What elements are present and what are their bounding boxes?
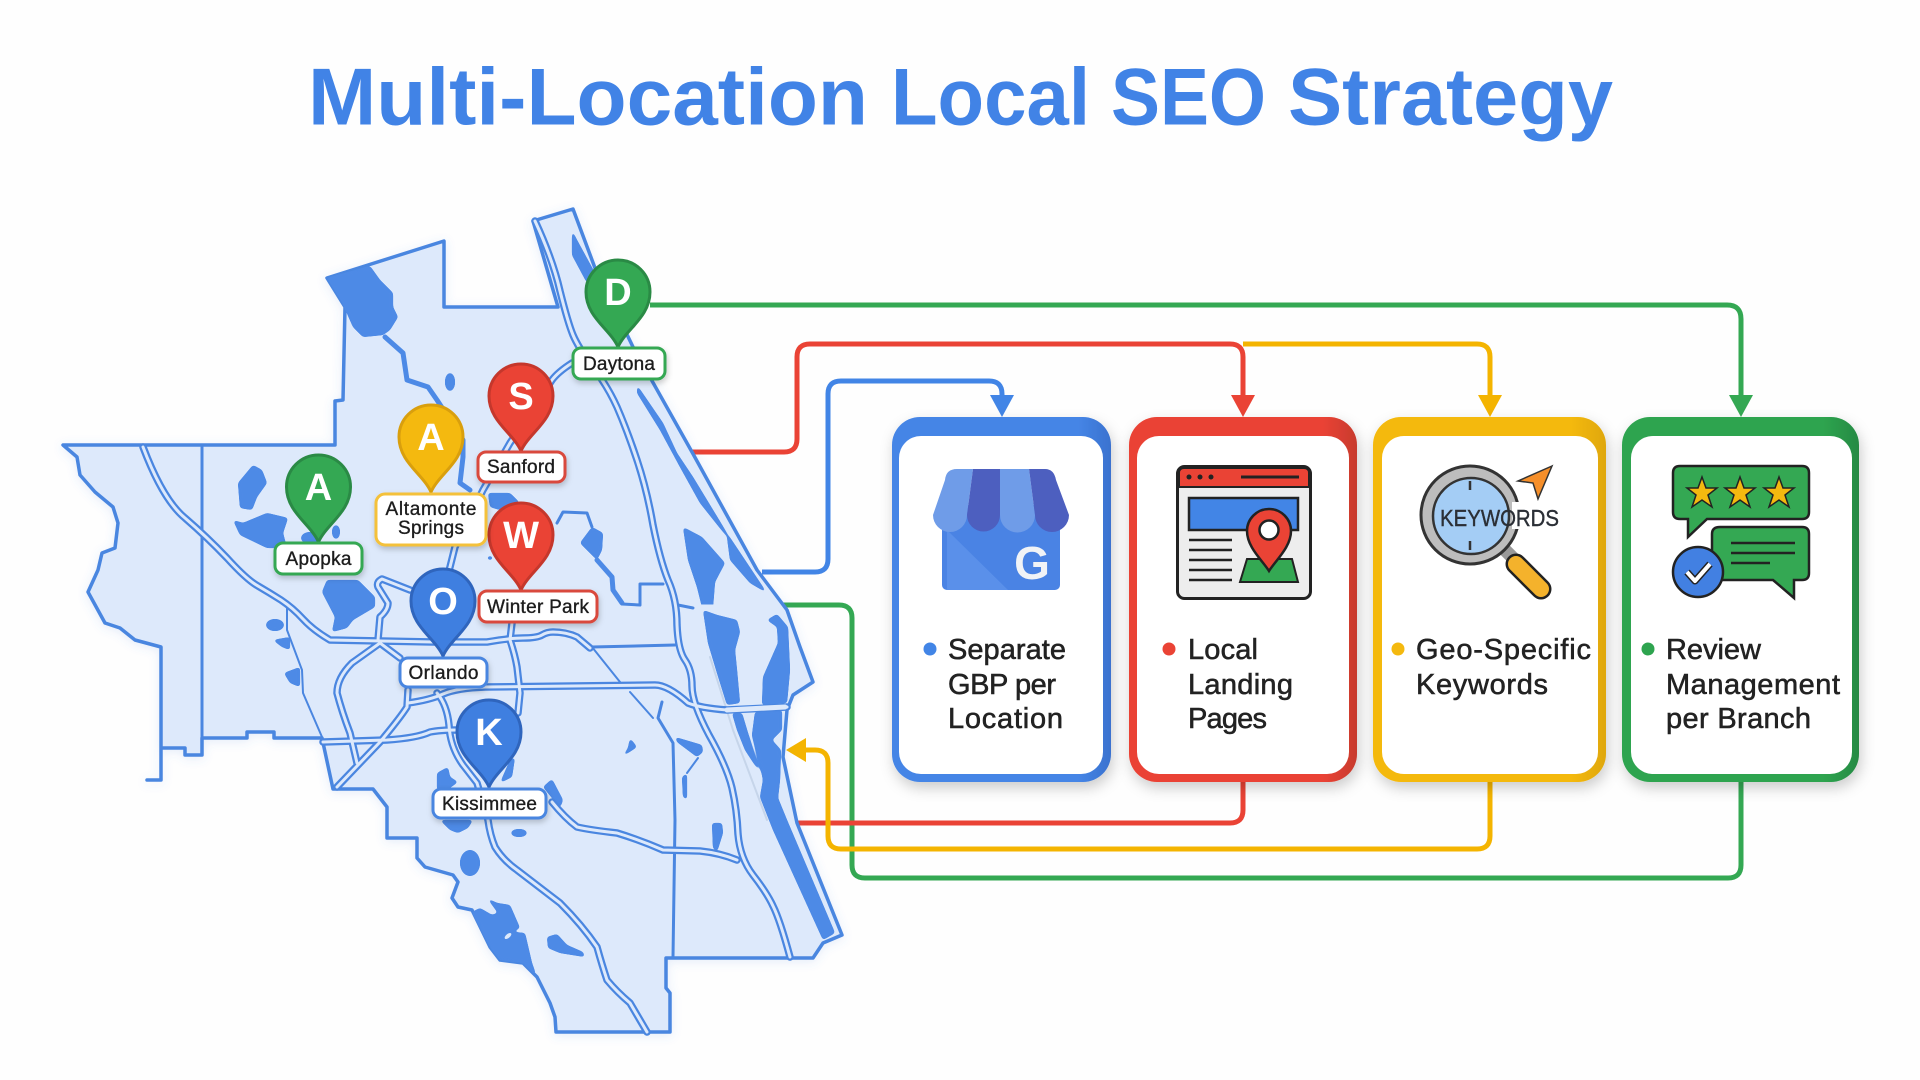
card text (948, 634, 1066, 735)
card text: Separate (948, 634, 1066, 666)
title (308, 52, 1613, 142)
icon: reviews with stars and check (1673, 466, 1809, 598)
label: Apopka (275, 543, 362, 574)
title: Multi-Location (308, 52, 868, 142)
pin: Apopka (286, 455, 350, 542)
card text: Landing (1188, 669, 1293, 701)
arrow: reviews back to map (783, 605, 1741, 878)
title: SEO (1111, 52, 1266, 142)
title: Strategy (1288, 52, 1613, 142)
pin: Orlando (411, 569, 475, 656)
label: Altamonte Springs: Springs (398, 518, 464, 539)
card text: Review (1666, 634, 1762, 666)
card text (1666, 634, 1840, 735)
card text: per Branch (1666, 703, 1811, 735)
panel: Review Management per Branch (1622, 417, 1859, 782)
panel: Separate GBP per Location (892, 417, 1111, 782)
pin: Apopka: A (305, 467, 332, 509)
highways (143, 221, 790, 1032)
map land (63, 209, 842, 1032)
arrow: map to keywords (1243, 344, 1502, 417)
pin: Altamonte Springs (399, 405, 463, 492)
pin: Daytona (586, 260, 650, 347)
card text: Geo-Specific (1416, 634, 1591, 666)
arrow: landing pages back to map (796, 782, 1243, 823)
card text: GBP per (948, 669, 1056, 701)
label: Altamonte Springs: Altamonte (386, 499, 476, 520)
icon: Google Business storefront (933, 469, 1069, 590)
icon: magnifying glass with keywords (1421, 466, 1562, 589)
label: Apopka: Apopka (286, 549, 352, 570)
label: Winter Park: Winter Park (487, 597, 590, 618)
pin: Daytona: D (604, 272, 632, 314)
label: Altamonte Springs (376, 494, 486, 545)
pin: Orlando: O (428, 581, 458, 623)
label: Kissimmee (433, 789, 546, 818)
arrow: map to GBP (762, 381, 1014, 572)
arrow: keywords back to map (786, 738, 1490, 849)
card text: Keywords (1416, 669, 1548, 701)
pin: Altamonte Springs: A (417, 417, 445, 459)
icon: landing page with pin (1178, 466, 1310, 598)
icon: Google Business storefront: G (1014, 537, 1050, 589)
arrow: Daytona to reviews (650, 305, 1753, 417)
pin: Winter Park (489, 503, 553, 590)
bullet (1392, 642, 1404, 656)
pin: Kissimmee: K (475, 712, 503, 754)
connectors (650, 305, 1753, 878)
bullet (1162, 642, 1176, 656)
rivers (385, 337, 470, 490)
bullet (924, 642, 936, 656)
pin: Kissimmee (457, 700, 521, 787)
pin: Sanford: S (508, 376, 534, 418)
thin boundaries (202, 447, 693, 957)
panel: Local Landing Pages (1129, 417, 1357, 782)
title: Local (891, 52, 1090, 142)
lakes (233, 230, 835, 977)
white hole in lake (504, 932, 512, 940)
label: Sanford (478, 452, 565, 482)
card text (1416, 634, 1591, 701)
pin: Winter Park: W (503, 515, 539, 557)
label: Sanford: Sanford (487, 457, 555, 478)
map (63, 209, 842, 1032)
card text: Location (948, 703, 1063, 735)
panel: Geo-Specific Keywords (1373, 417, 1606, 782)
label: Winter Park (479, 591, 597, 622)
label: Daytona: Daytona (583, 354, 655, 375)
label: Daytona (573, 348, 665, 379)
card text (1188, 634, 1293, 735)
label: Orlando: Orlando (408, 663, 478, 684)
icon: magnifying glass with keywords: KEYWORDS (1440, 505, 1559, 531)
card text: Management (1666, 669, 1840, 701)
label: Orlando (400, 658, 487, 687)
pin: Sanford (489, 364, 553, 451)
arrow: map to landing pages (692, 344, 1255, 452)
card text: Local (1188, 634, 1258, 666)
card text: Pages (1188, 703, 1267, 735)
bullet (1642, 642, 1654, 656)
label: Kissimmee: Kissimmee (442, 794, 537, 815)
